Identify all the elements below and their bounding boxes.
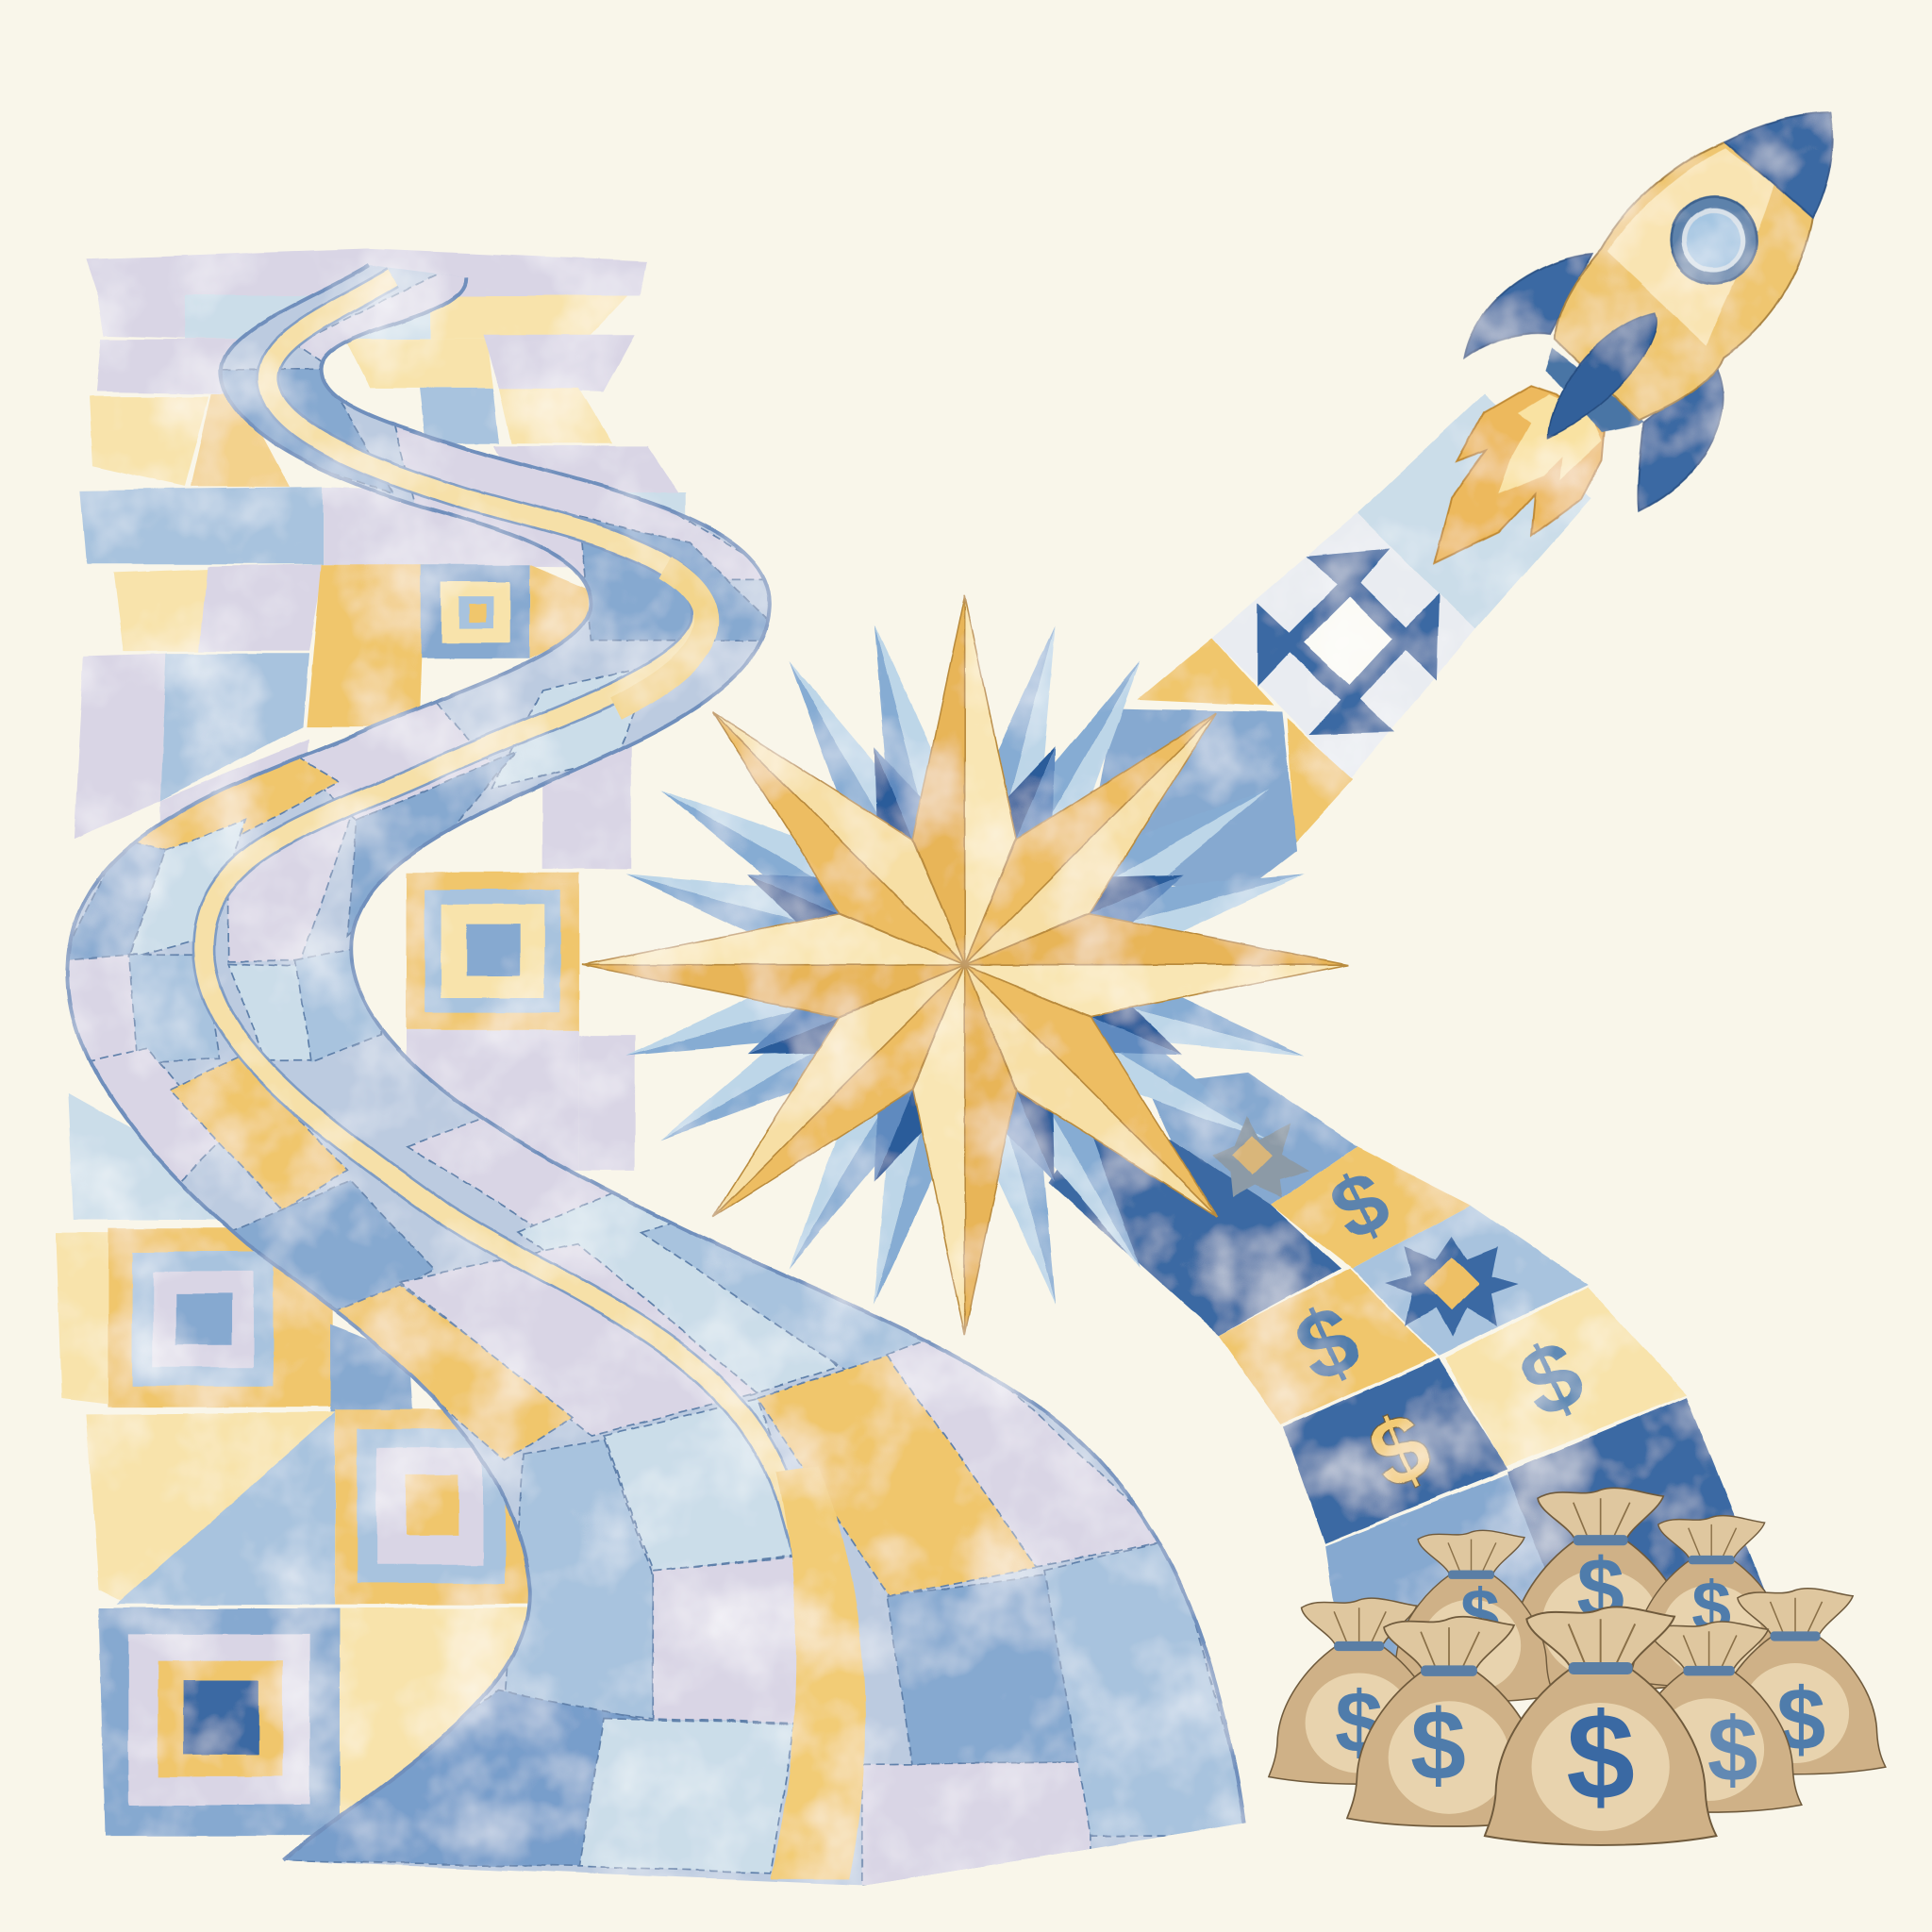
bag: front centre — [1485, 1607, 1716, 1845]
small star block — [1212, 1115, 1308, 1198]
quilted ribbon to rocket — [1084, 394, 1592, 899]
bag: front right — [1616, 1622, 1802, 1812]
bag: front centre: $ — [1566, 1688, 1635, 1825]
dollar signs on ribbon: $ — [1505, 1319, 1599, 1439]
bag: back centre: $ — [1576, 1541, 1624, 1637]
eight point star block — [1385, 1236, 1518, 1337]
quilt block: arrows and diamond — [1257, 550, 1440, 734]
rocket — [1465, 113, 1833, 511]
bag: back centre — [1502, 1488, 1699, 1690]
nose cone — [1725, 113, 1833, 218]
lane stripe outline — [192, 268, 792, 1560]
bag: far right: $ — [1776, 1670, 1825, 1769]
bag: back left — [1388, 1530, 1555, 1702]
dollar signs on ribbon — [1280, 1150, 1599, 1510]
quilted ribbon from money bags — [1049, 1072, 1774, 1688]
window — [1671, 197, 1757, 283]
bag: back right: $ — [1691, 1567, 1731, 1646]
bag: front left — [1347, 1617, 1551, 1826]
dollar signs on ribbon: $ — [1316, 1150, 1403, 1260]
bag: far right — [1705, 1589, 1886, 1774]
compass star: gold points — [581, 595, 1348, 1335]
wide bottom of yellow lane — [770, 1466, 865, 1879]
dollar signs on ribbon: $ — [1280, 1283, 1374, 1404]
flame — [1434, 386, 1605, 563]
right fin — [1638, 366, 1724, 511]
bag: front right: $ — [1707, 1700, 1757, 1801]
left quilt background patches — [56, 249, 685, 1836]
bag: back left: $ — [1460, 1574, 1500, 1654]
bag: left: $ — [1335, 1674, 1383, 1771]
bag: front left: $ — [1410, 1690, 1466, 1801]
star burst: blue spikes — [615, 615, 1314, 1314]
road outer stitched edges — [68, 265, 1244, 1860]
collar — [1545, 347, 1643, 432]
bag: back right — [1628, 1516, 1795, 1687]
body highlight — [1607, 148, 1774, 345]
middle fin — [1547, 313, 1657, 438]
yellow lane stripe — [194, 270, 790, 1538]
left fin — [1465, 254, 1592, 358]
bag: left — [1269, 1598, 1449, 1784]
winding patchwork road — [49, 246, 1281, 1897]
money bags — [1269, 1488, 1886, 1845]
wide yellow segment near the bend — [616, 567, 707, 708]
dollar signs on ribbon: $ — [1354, 1391, 1447, 1510]
body — [1555, 142, 1812, 420]
